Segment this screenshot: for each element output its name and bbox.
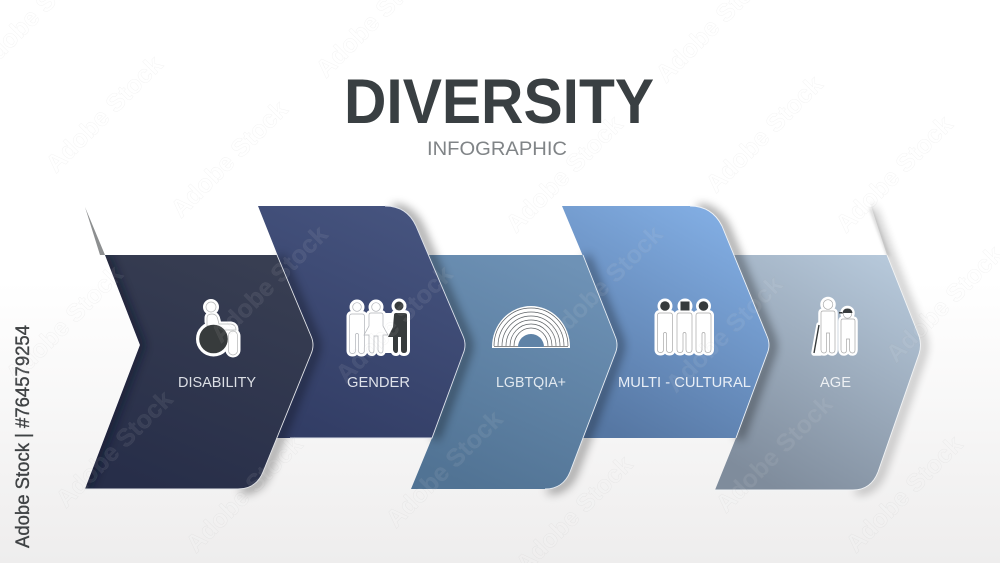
icon: wheelchair — [198, 302, 238, 355]
watermark: Adobe Stock — [180, 430, 308, 558]
watermark: Adobe Stock — [0, 260, 128, 388]
disability arrow shape — [85, 255, 313, 489]
label: multi-cultural: MULTI - CULTURAL — [618, 374, 751, 391]
stock id side text: Adobe Stock | #764579254 — [13, 325, 34, 548]
watermark: Adobe Stock — [710, 390, 838, 518]
watermark: Adobe Stock — [840, 430, 968, 558]
watermark: Adobe Stock — [330, 260, 458, 388]
watermark: Adobe Stock — [40, 50, 168, 178]
panel: age — [715, 200, 924, 491]
icon: elder and child — [814, 300, 855, 353]
watermark: Adobe Stock — [660, 270, 788, 398]
watermark: Adobe Stock — [205, 220, 333, 348]
disability fold wedge — [85, 207, 105, 255]
panel: gender — [258, 206, 468, 439]
panel: disability — [85, 207, 316, 490]
panel: lgbtqia+ — [411, 255, 620, 490]
watermark: Adobe Stock — [540, 220, 668, 348]
watermark: Adobe Stock — [165, 95, 293, 223]
icon: rainbow — [493, 307, 569, 347]
title: DIVERSITY — [344, 67, 654, 137]
multi-cultural arrow shape — [562, 206, 769, 438]
watermark: Adobe Stock — [50, 385, 178, 513]
subtitle: INFOGRAPHIC — [427, 138, 567, 160]
watermark: Adobe Stock — [500, 110, 628, 238]
label: disability: DISABILITY — [178, 374, 256, 391]
watermark: Adobe Stock — [830, 110, 958, 238]
panel: multi-cultural — [562, 206, 772, 439]
label: lgbtqia+: LGBTQIA+ — [496, 374, 566, 391]
lgbtqia+ arrow shape — [411, 255, 617, 489]
age arrow shape — [715, 255, 920, 490]
gender arrow shape — [258, 206, 465, 438]
label: age: AGE — [820, 374, 851, 391]
watermark: Adobe Stock — [700, 70, 828, 198]
label: gender: GENDER — [347, 374, 410, 391]
watermark: Adobe Stock — [380, 405, 508, 533]
icon: gender group — [350, 302, 407, 354]
icon: multi-cultural group — [658, 301, 711, 352]
